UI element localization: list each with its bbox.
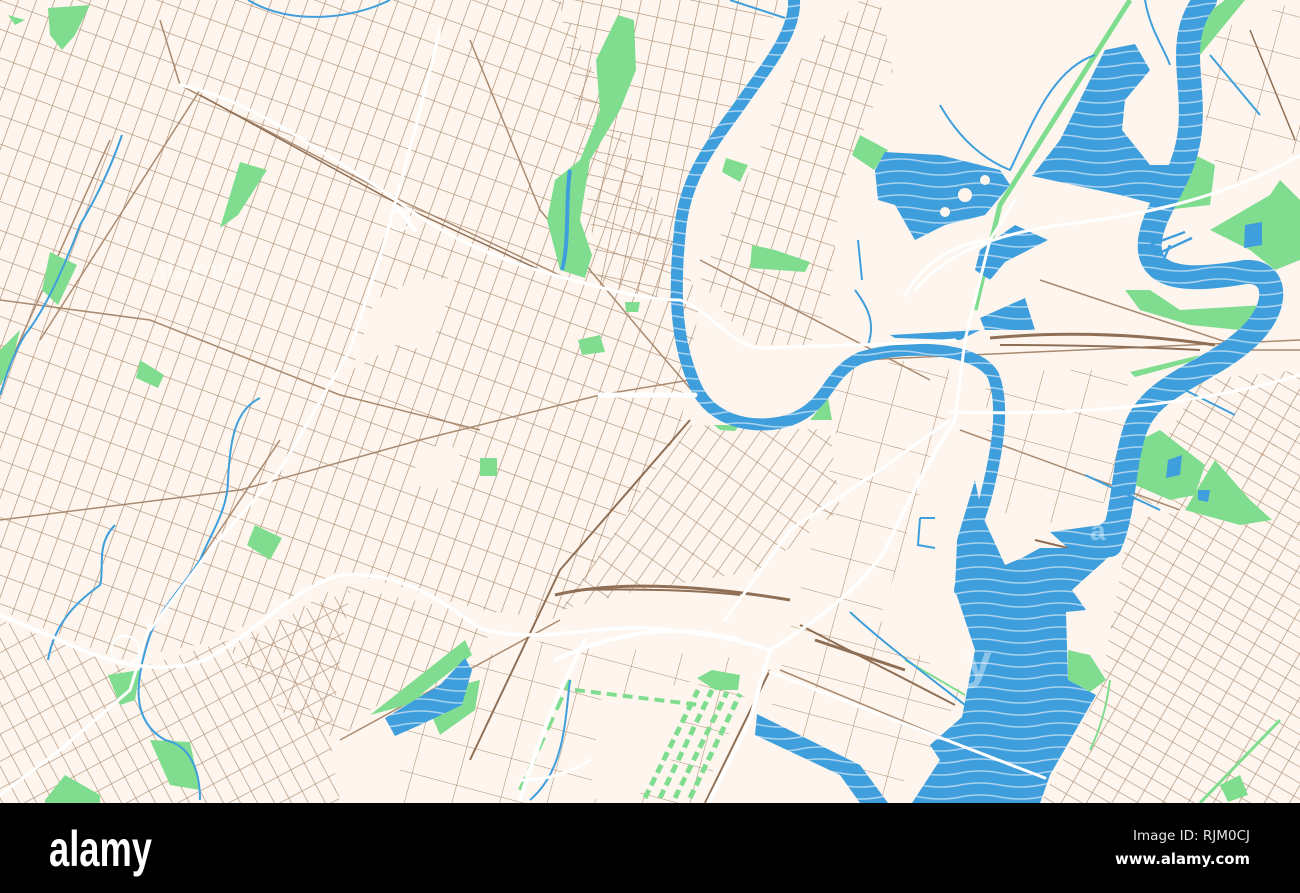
marsh islets	[940, 175, 990, 217]
watermark: y	[965, 636, 992, 689]
airport strips	[645, 690, 740, 798]
bay	[912, 480, 1132, 803]
vacant blocks	[352, 0, 1130, 800]
upper lake	[1032, 44, 1178, 208]
watermark	[150, 254, 1106, 689]
lower channel	[755, 714, 888, 803]
harbor slips	[1150, 232, 1192, 268]
railways	[200, 30, 1295, 803]
river: Hackensack	[1110, 0, 1271, 545]
water: rivers and bay	[385, 0, 1271, 803]
alamy logo: alamy	[49, 821, 152, 877]
watermark: alamy	[150, 254, 235, 287]
image id: Image ID: RJM0CJ	[1133, 828, 1250, 844]
marsh basin	[875, 152, 1010, 240]
park ponds	[1166, 222, 1262, 502]
river: Passaic	[677, 0, 999, 590]
website: www.alamy.com	[1115, 850, 1250, 868]
park: Branch Brook	[547, 15, 636, 278]
basin near interchange	[975, 225, 1048, 280]
footer bar	[0, 803, 1300, 893]
watermark: a	[1090, 515, 1106, 546]
green strips	[520, 0, 1280, 803]
reservoir	[385, 658, 472, 736]
